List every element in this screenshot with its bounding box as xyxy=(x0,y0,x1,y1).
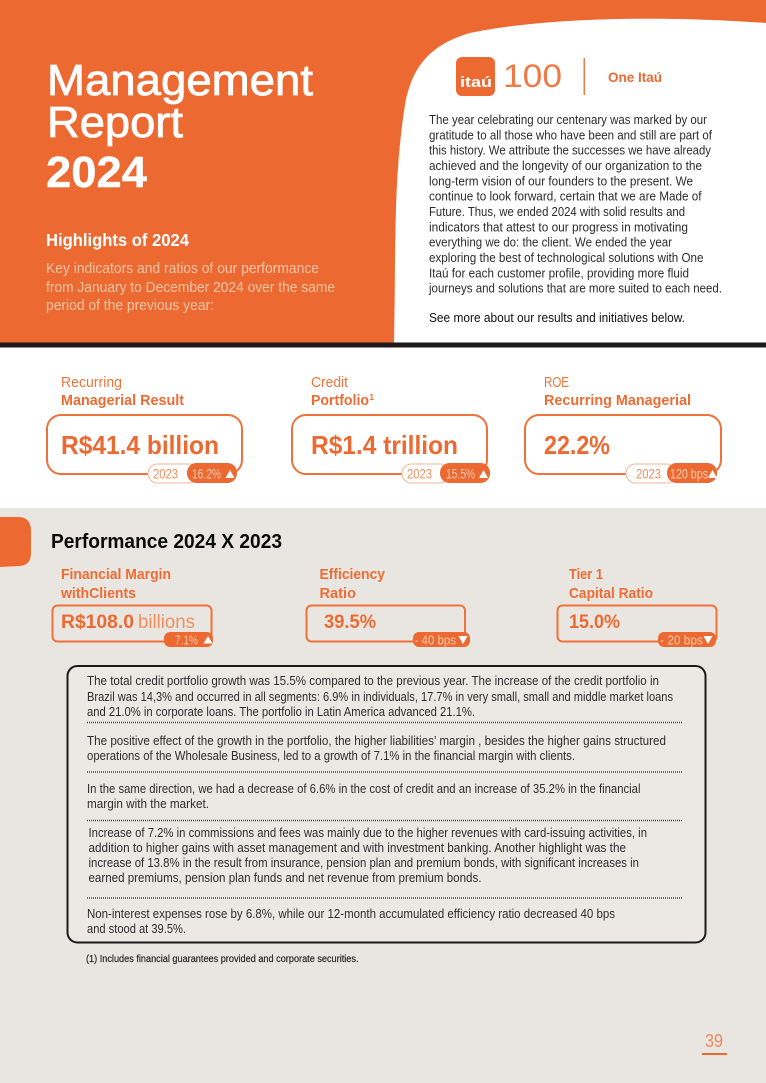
text block: highlights description: period of the previous year: xyxy=(46,297,214,314)
text block: centenary introduction: this history. We attribute the successes we have already xyxy=(429,143,711,158)
panel: orange header background xyxy=(0,0,766,343)
text block: commissions and fees: addition to higher gains with asset management and with investment banking. Another highlight was the xyxy=(88,840,626,855)
panel: KPI recurring managerial result: 16.2% xyxy=(192,466,221,482)
text block: centenary introduction: exploring the best of technological solutions with One xyxy=(429,250,704,265)
text block: credit portfolio growth: The total credit portfolio growth was 15.5% compared to the previous year. The increase of the credit portfolio in xyxy=(87,673,659,688)
heading: highlights of 2024: Highlights of 2024 xyxy=(46,230,189,250)
text block: centenary introduction: long-term vision of our founders to the present. We xyxy=(429,173,693,188)
panel: financial margin with clients: 7.1% xyxy=(175,632,198,648)
page number xyxy=(702,1031,727,1055)
text block: centenary introduction: everything we do: the client. We ended the year xyxy=(429,235,673,250)
text block: credit portfolio growth xyxy=(87,673,673,719)
panel: financial margin with clients: R$108.0 xyxy=(61,611,134,633)
panel: efficiency ratio: - 40 bps xyxy=(414,632,456,648)
panel: efficiency ratio: 39.5% xyxy=(324,611,376,633)
text block: financial margin: operations of the Wholesale Business, led to a growth of 7.1% in the financial margin with clients. xyxy=(87,748,575,763)
icon: itau 100 logo: One Itaú xyxy=(608,69,662,85)
title: 2024 xyxy=(46,148,148,197)
panel: KPI recurring managerial result xyxy=(47,374,242,483)
text block: highlights description xyxy=(46,260,335,314)
footnote: (1) Includes financial guarantees provided and corporate securities. xyxy=(86,954,358,965)
panel: tier 1 capital ratio: 15.0% xyxy=(569,611,620,633)
icon: itau 100 logo: itaú xyxy=(460,74,492,91)
panel: KPI recurring managerial result: Recurring xyxy=(61,374,122,391)
panel: KPI ROE recurring managerial xyxy=(525,374,721,483)
panel: KPI credit portfolio: R$1.4 trillion xyxy=(311,430,458,460)
panel: white intro panel xyxy=(394,19,766,343)
title: Management xyxy=(47,56,313,105)
text block: highlights description: Key indicators and ratios of our performance xyxy=(46,260,319,277)
text block: financial margin xyxy=(87,733,666,763)
text block: non-interest expenses xyxy=(87,906,615,936)
panel: financial margin with clients: billions xyxy=(138,611,195,633)
panel: KPI credit portfolio: Portfolio xyxy=(311,392,369,409)
panel: KPI recurring managerial result: 2023 xyxy=(153,466,178,482)
text block: centenary introduction: journeys and solutions that are more suited to each need. xyxy=(428,281,722,296)
text block: credit portfolio growth: Brazil was 14,3% and occurred in all segments: 6.9% in individuals, 17.7% in very small, small and middle market loans xyxy=(87,689,673,704)
text block: commissions and fees: increase of 13.8% in the result from insurance, pension plan and premium bonds, with significant increases in xyxy=(88,855,639,870)
page number: 39 xyxy=(705,1031,723,1051)
panel: KPI ROE recurring managerial: 2023 xyxy=(636,466,661,482)
panel: commentary box xyxy=(68,666,706,942)
panel: efficiency ratio: Efficiency xyxy=(320,566,386,583)
text block: highlights description: from January to December 2024 over the same xyxy=(46,279,335,296)
icon: itau 100 logo xyxy=(456,57,662,96)
panel: KPI recurring managerial result: R$41.4 billion xyxy=(61,430,219,460)
panel: tier 1 capital ratio: Capital Ratio xyxy=(569,585,653,602)
text block: commissions and fees: Increase of 7.2% in commissions and fees was mainly due to the higher revenues with card-issuing activities, in xyxy=(88,825,647,840)
text block: non-interest expenses: and stood at 39.5%. xyxy=(87,921,186,936)
panel: financial margin with clients: withClients xyxy=(60,585,136,602)
panel: KPI recurring managerial result: Managerial Result xyxy=(61,392,184,409)
panel: beige performance background xyxy=(0,508,766,1083)
panel: KPI ROE recurring managerial: ROE xyxy=(544,374,569,391)
text block: centenary introduction: Future. Thus, we ended 2024 with solid results and xyxy=(429,204,685,219)
heading: performance 2024 x 2023: Performance 2024 X 2023 xyxy=(51,531,282,553)
panel: KPI credit portfolio xyxy=(292,374,490,483)
text block: financial margin: The positive effect of the growth in the portfolio, the higher liabilities’ margin , besides the higher gains structured xyxy=(87,733,666,748)
text block: cost of credit: In the same direction, we had a decrease of 6.6% in the cost of credit and an increase of 35.2% in the financial xyxy=(87,781,640,796)
panel: KPI ROE recurring managerial: Recurring Managerial xyxy=(544,392,691,409)
panel: efficiency ratio: Ratio xyxy=(320,585,356,602)
text block: centenary introduction: continue to look forward, certain that we are Made of xyxy=(429,189,702,204)
text block: see more: See more about our results and initiatives below. xyxy=(429,310,685,325)
title xyxy=(46,56,313,197)
panel: KPI credit portfolio: 2023 xyxy=(407,466,432,482)
text block: credit portfolio growth: and 21.0% in corporate loans. The portfolio in Latin America advanced 21.1%. xyxy=(87,704,475,719)
panel: KPI credit portfolio: Credit xyxy=(311,374,349,391)
text block: centenary introduction xyxy=(428,112,722,296)
black divider bar xyxy=(0,342,766,348)
text block: cost of credit: margin with the market. xyxy=(87,796,209,811)
icon: itau 100 logo: 100 xyxy=(503,58,562,94)
text block: commissions and fees xyxy=(88,825,647,885)
panel: financial margin with clients xyxy=(52,566,213,648)
text block: non-interest expenses: Non-interest expenses rose by 6.8%, while our 12-month accumulated efficiency ratio decreased 40 bps xyxy=(87,906,615,921)
text block: centenary introduction: Itaú for each customer profile, providing more fluid xyxy=(429,265,689,280)
text block: centenary introduction: The year celebrating our centenary was marked by our xyxy=(429,112,708,127)
panel: KPI credit portfolio: 15.5% xyxy=(446,466,475,482)
panel: tier 1 capital ratio: - 20 bps xyxy=(660,632,703,648)
panel: KPI ROE recurring managerial: 22.2% xyxy=(544,430,610,460)
panel: tier 1 capital ratio: Tier 1 xyxy=(569,566,603,583)
text block: centenary introduction: indicators that attest to our progress in motivating xyxy=(429,219,688,234)
text block: cost of credit xyxy=(87,781,640,811)
text block: centenary introduction: achieved and the longevity of our organization to the xyxy=(429,158,702,173)
panel: KPI credit portfolio: 1 xyxy=(370,393,374,402)
icon: orange side tab xyxy=(0,517,31,567)
panel: tier 1 capital ratio xyxy=(558,566,716,648)
title: Report xyxy=(47,98,183,147)
panel: financial margin with clients: Financial Margin xyxy=(61,566,171,583)
text block: commissions and fees: earned premiums, pension plan funds and net revenue from premium bonds. xyxy=(88,870,482,885)
text block: centenary introduction: gratitude to all those who have been and still are part of xyxy=(429,127,712,142)
panel: KPI ROE recurring managerial: 120 bps xyxy=(670,466,708,482)
panel: efficiency ratio xyxy=(306,566,470,648)
